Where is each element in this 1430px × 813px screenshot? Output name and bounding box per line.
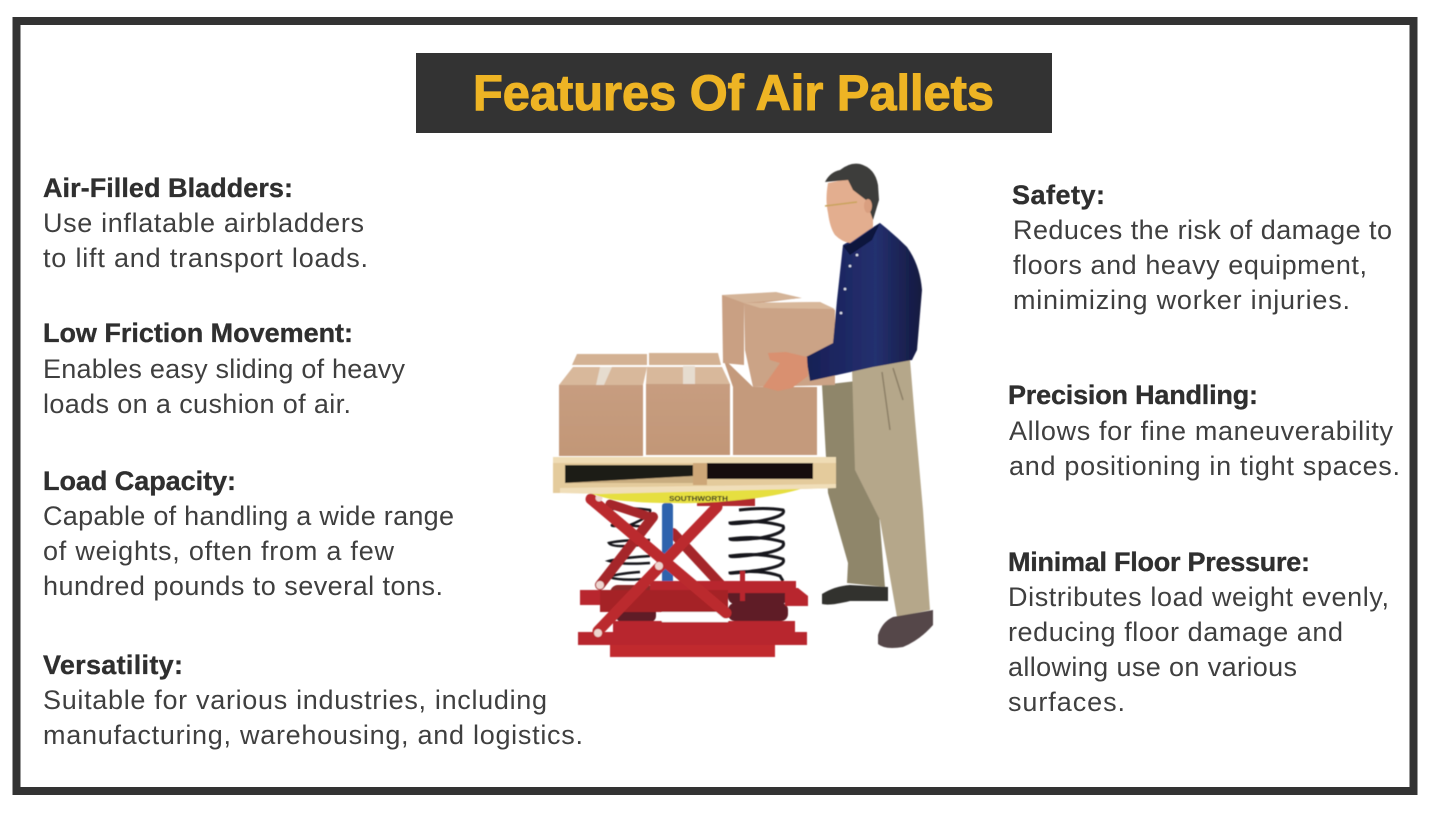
worker: glasses bbox=[825, 202, 857, 206]
front right box bbox=[723, 358, 817, 455]
feature: safety: minimizing worker injuries. bbox=[1013, 285, 1350, 315]
feature: air-filled bladders: Air-Filled Bladders: bbox=[43, 173, 293, 203]
feature: safety: floors and heavy equipment, bbox=[1013, 250, 1367, 280]
feature: safety: Safety: bbox=[1012, 180, 1105, 210]
worker: hand bbox=[763, 352, 808, 391]
worker: front shoe bbox=[878, 610, 933, 648]
feature: minimal floor pressure: Distributes load weight evenly, bbox=[1008, 582, 1389, 612]
feature: versatility: Versatility: bbox=[43, 650, 183, 680]
lift: back scissor arms bbox=[600, 504, 723, 587]
feature: versatility: Suitable for various industries, including bbox=[43, 685, 547, 715]
feature: safety: Reduces the risk of damage to bbox=[1013, 215, 1392, 245]
feature: versatility bbox=[43, 650, 583, 750]
lift: pivot pins bbox=[594, 494, 663, 637]
illustration: worker loading boxes on air pallet lift bbox=[553, 164, 933, 657]
feature: safety bbox=[1012, 180, 1392, 315]
feature: load capacity: hundred pounds to several tons. bbox=[43, 571, 443, 601]
feature: low friction movement: Enables easy sliding of heavy bbox=[43, 354, 406, 384]
lift: yellow turntable bbox=[590, 487, 807, 503]
title text: Features Of Air Pallets bbox=[473, 65, 994, 121]
lift: front scissor arms bbox=[591, 499, 726, 631]
feature: load capacity: Capable of handling a wide range bbox=[43, 501, 454, 531]
back row flaps bbox=[572, 354, 647, 365]
lift: brand label: SOUTHWORTH bbox=[669, 496, 728, 503]
feature: minimal floor pressure: surfaces. bbox=[1008, 687, 1125, 717]
feature: load capacity bbox=[43, 466, 454, 601]
title banner bbox=[416, 53, 1052, 133]
worker: trouser pleats bbox=[882, 368, 903, 430]
lift: top plate arm bbox=[697, 497, 755, 506]
feature: precision handling: Precision Handling: bbox=[1008, 380, 1258, 410]
worker: shirt bbox=[806, 223, 922, 381]
feature: minimal floor pressure: allowing use on various bbox=[1008, 652, 1297, 682]
front left box bbox=[559, 367, 647, 385]
worker: back shoe bbox=[822, 585, 888, 605]
feature: air-filled bladders: Use inflatable airbladders bbox=[43, 208, 364, 238]
worker: front leg bbox=[852, 360, 930, 617]
worker: collar bbox=[843, 223, 880, 255]
worker: ear bbox=[864, 199, 872, 213]
upper back box bbox=[722, 295, 800, 365]
cardboard boxes bbox=[559, 292, 835, 456]
feature: low friction movement: Low Friction Movement: bbox=[43, 318, 353, 348]
wooden pallet bbox=[553, 457, 836, 494]
feature: precision handling bbox=[1008, 380, 1400, 481]
feature: precision handling: Allows for fine maneuverability bbox=[1009, 416, 1394, 446]
feature: versatility: manufacturing, warehousing, and logistics. bbox=[43, 720, 583, 750]
feature: load capacity: of weights, often from a few bbox=[43, 536, 394, 566]
worker: hair bbox=[825, 164, 879, 220]
feature: precision handling: and positioning in tight spaces. bbox=[1009, 451, 1400, 481]
feature: air-filled bladders bbox=[43, 173, 368, 273]
feature: minimal floor pressure: Minimal Floor Pressure: bbox=[1008, 547, 1310, 577]
feature: air-filled bladders: to lift and transport loads. bbox=[43, 243, 368, 273]
held box top edge bbox=[744, 302, 835, 309]
feature: minimal floor pressure: reducing floor damage and bbox=[1008, 617, 1343, 647]
worker: back leg bbox=[822, 380, 885, 587]
lift: air bags bbox=[610, 585, 788, 622]
feature: load capacity: Load Capacity: bbox=[43, 466, 236, 496]
feature: low friction movement bbox=[43, 318, 406, 419]
lift: blue column bbox=[662, 503, 673, 591]
feature: minimal floor pressure bbox=[1008, 547, 1389, 717]
held box bbox=[744, 302, 835, 387]
feature: low friction movement: loads on a cushion of air. bbox=[43, 389, 351, 419]
lift: red base bbox=[578, 571, 808, 657]
front middle box bbox=[646, 367, 730, 384]
worker: shirt buttons bbox=[840, 254, 858, 314]
worker: face bbox=[826, 178, 873, 243]
lift: springs bbox=[609, 508, 784, 581]
